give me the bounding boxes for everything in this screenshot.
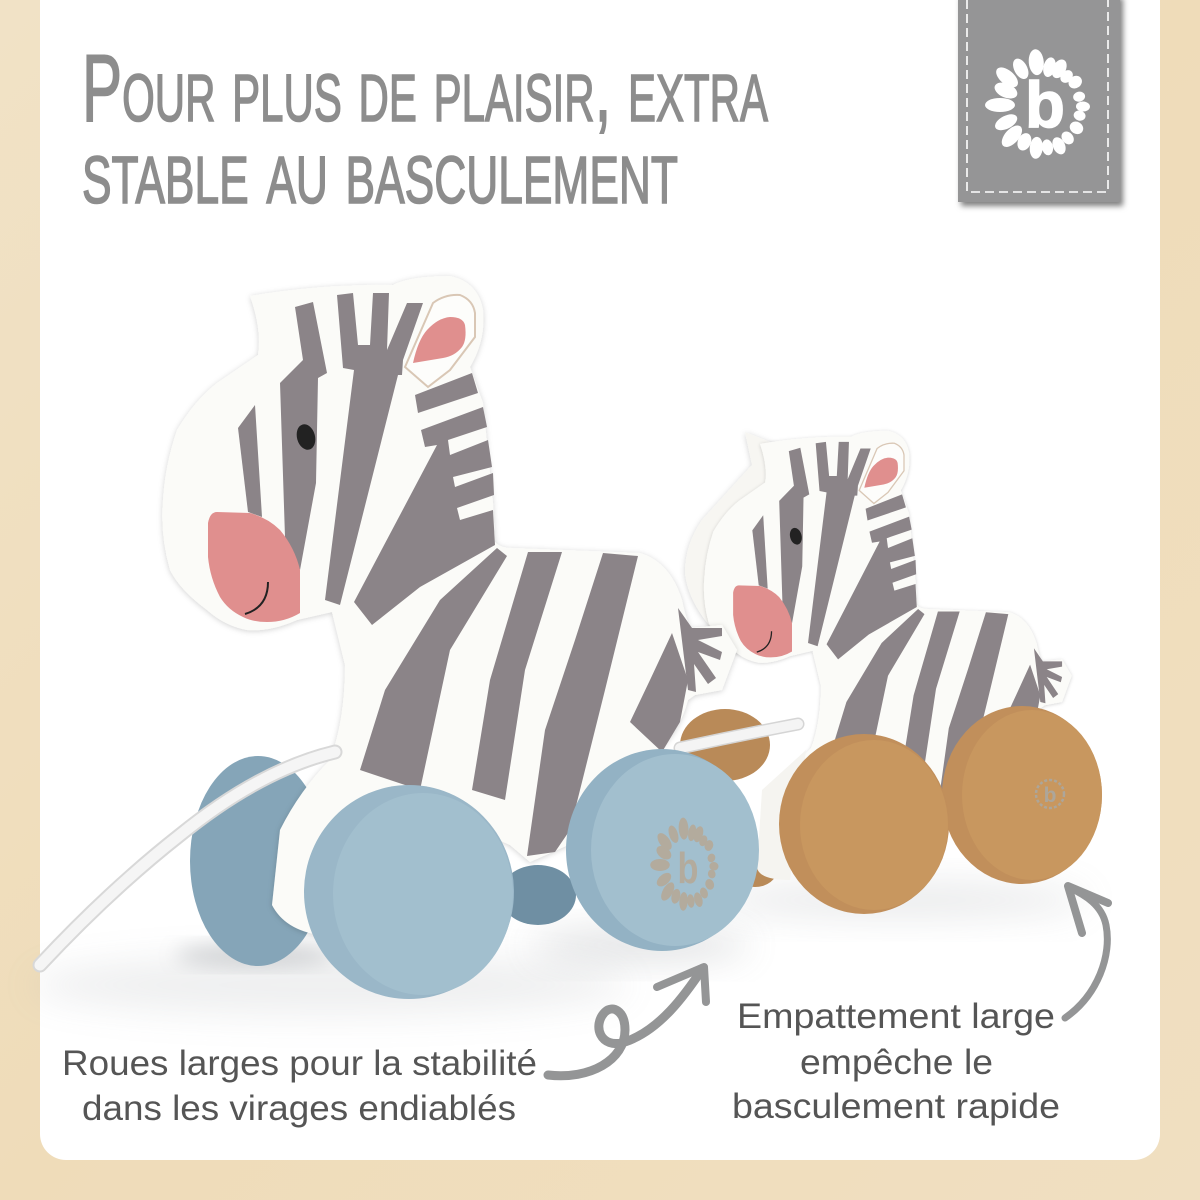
wheel logo: b bbox=[678, 844, 698, 893]
right blue wheel bbox=[566, 749, 759, 951]
stripes bbox=[238, 293, 722, 856]
arrow: left callout bbox=[548, 967, 706, 1076]
wheel logo bbox=[650, 817, 719, 911]
small rear brown wheel bbox=[942, 706, 1102, 884]
wheel logo: b bbox=[1044, 784, 1056, 807]
small zebra toy bbox=[680, 431, 1102, 914]
arrow: right callout bbox=[1065, 886, 1108, 1018]
text: wide wheels: dans les virages endiablés bbox=[82, 1089, 516, 1128]
title: stable au basculement bbox=[82, 117, 678, 224]
title bbox=[82, 35, 768, 224]
back blue wheels bbox=[190, 756, 576, 966]
zebra body bbox=[162, 276, 737, 935]
small rope bbox=[680, 724, 798, 748]
text: wide wheels bbox=[62, 1044, 537, 1128]
rope bbox=[40, 752, 335, 965]
small zebra body bbox=[704, 431, 1072, 862]
small front brown wheel bbox=[779, 734, 949, 914]
wheel logo bbox=[1036, 780, 1064, 808]
text: wide wheelbase bbox=[732, 997, 1060, 1126]
text: wide wheels: Roues larges pour la stabilité bbox=[62, 1044, 537, 1083]
smile bbox=[245, 582, 268, 614]
floor shadows bbox=[30, 884, 1090, 1015]
ear bbox=[405, 295, 475, 387]
text: wide wheelbase: Empattement large bbox=[737, 997, 1055, 1036]
text: wide wheelbase: empêche le bbox=[800, 1043, 993, 1082]
small head edge bbox=[685, 432, 790, 652]
nose bbox=[208, 512, 300, 622]
icon: brand logo bbox=[985, 49, 1090, 159]
big zebra toy bbox=[40, 276, 759, 999]
front blue wheel bbox=[304, 785, 514, 999]
title: Pour plus de plaisir, extra bbox=[82, 35, 768, 142]
text: wide wheelbase: basculement rapide bbox=[732, 1087, 1060, 1126]
small back wheels bbox=[680, 709, 777, 887]
eye bbox=[294, 422, 318, 452]
small leg bbox=[757, 750, 806, 880]
brand tag bbox=[958, 0, 1120, 202]
icon: brand logo: b bbox=[1025, 68, 1065, 141]
